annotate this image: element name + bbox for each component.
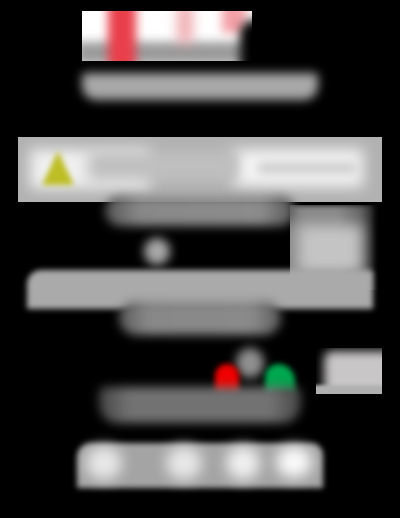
icon: bottom highlight 2 <box>166 446 202 480</box>
icon: pale red mark <box>179 3 191 43</box>
icon: pink mark <box>222 3 246 33</box>
pill heading: fourth <box>99 387 301 423</box>
icon: green dot <box>265 364 295 394</box>
icon: bottom highlight 3 <box>226 446 260 480</box>
icon: warning triangle <box>42 151 74 185</box>
photo body <box>324 351 394 407</box>
icon: red logo mark <box>108 1 136 73</box>
logo text band <box>76 42 248 64</box>
icon: bottom highlight 1 <box>86 446 122 480</box>
side figure inner <box>298 225 362 273</box>
icon: gray circle <box>144 238 170 265</box>
highlighted text band right <box>233 149 363 187</box>
panel: side figure <box>290 205 382 290</box>
side figure ground <box>284 205 374 295</box>
pill heading: second <box>105 196 295 226</box>
panel: logo header <box>82 11 252 61</box>
panel: warning banner <box>18 137 382 202</box>
warning text right <box>258 163 356 173</box>
photo base <box>312 385 392 399</box>
icon: red dot <box>215 364 239 394</box>
image: small photo <box>316 348 382 394</box>
icon: gray circle top <box>236 348 264 378</box>
black corner cutout <box>240 20 290 80</box>
icon: bottom highlight 4 <box>276 446 312 478</box>
warning text <box>88 151 238 181</box>
highlighted text band <box>30 149 150 189</box>
heading bar: top <box>82 73 318 100</box>
panel: bottom row <box>77 443 323 488</box>
heading bar: wide <box>27 270 373 309</box>
pill heading: third <box>119 301 281 335</box>
